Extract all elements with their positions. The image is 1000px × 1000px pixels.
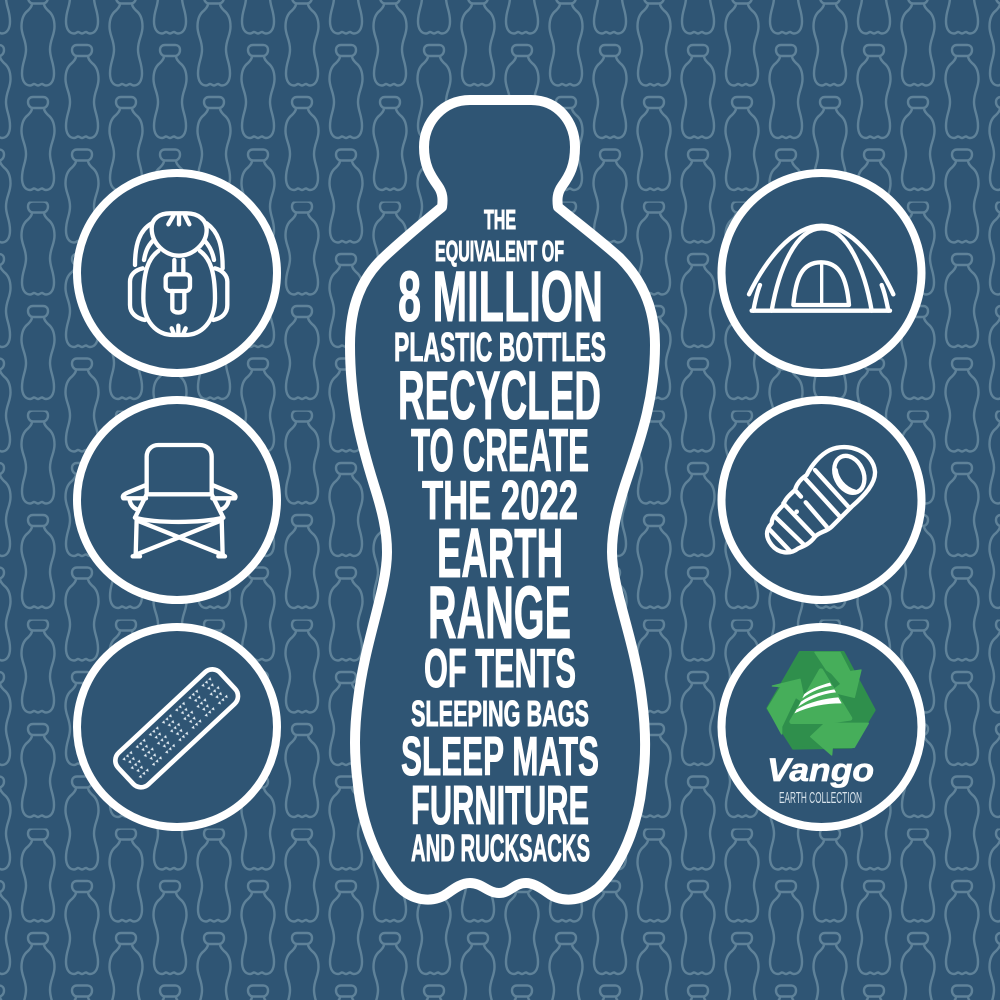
central bottle silhouette	[350, 100, 655, 900]
headline text inside bottle: SLEEP MATS	[401, 725, 599, 787]
logo wordmark: Vango: Vango	[767, 752, 874, 788]
icon: sleep mat	[111, 665, 242, 792]
headline text inside bottle: EARTH	[437, 514, 563, 592]
headline text inside bottle: OF TENTS	[424, 637, 576, 699]
panel: chair circle	[77, 400, 277, 600]
headline text inside bottle: AND RUCKSACKS	[411, 828, 590, 870]
icon: camping chair	[123, 445, 235, 556]
logo subtitle: Earth Collection: EARTH COLLECTION	[779, 790, 862, 807]
headline text inside bottle: PLASTIC BOTTLES	[394, 324, 606, 370]
icon: dome tent	[749, 226, 893, 311]
panel: tent circle	[722, 173, 922, 373]
headline text inside bottle: SLEEPING BAGS	[411, 693, 589, 734]
headline text inside bottle	[394, 204, 606, 870]
panel: Vango logo circle	[722, 627, 922, 827]
headline text inside bottle: THE 2022	[422, 469, 578, 531]
headline text inside bottle: RECYCLED	[398, 357, 601, 434]
icon: backpack	[130, 213, 227, 335]
headline text inside bottle: FURNITURE	[411, 774, 589, 836]
panel: sleeping bag circle	[722, 400, 922, 600]
headline text inside bottle: RANGE	[428, 571, 571, 654]
headline text inside bottle: EQUIVALENT OF	[435, 236, 564, 268]
logo: recycling symbol	[768, 652, 874, 755]
icon: sleeping bag	[767, 447, 875, 552]
headline text inside bottle: 8 MILLION	[398, 258, 603, 337]
panel: backpack circle	[77, 173, 277, 373]
headline text inside bottle: TO CREATE	[411, 417, 589, 484]
headline text inside bottle: THE	[484, 204, 516, 235]
panel: sleep mat circle	[77, 627, 277, 827]
